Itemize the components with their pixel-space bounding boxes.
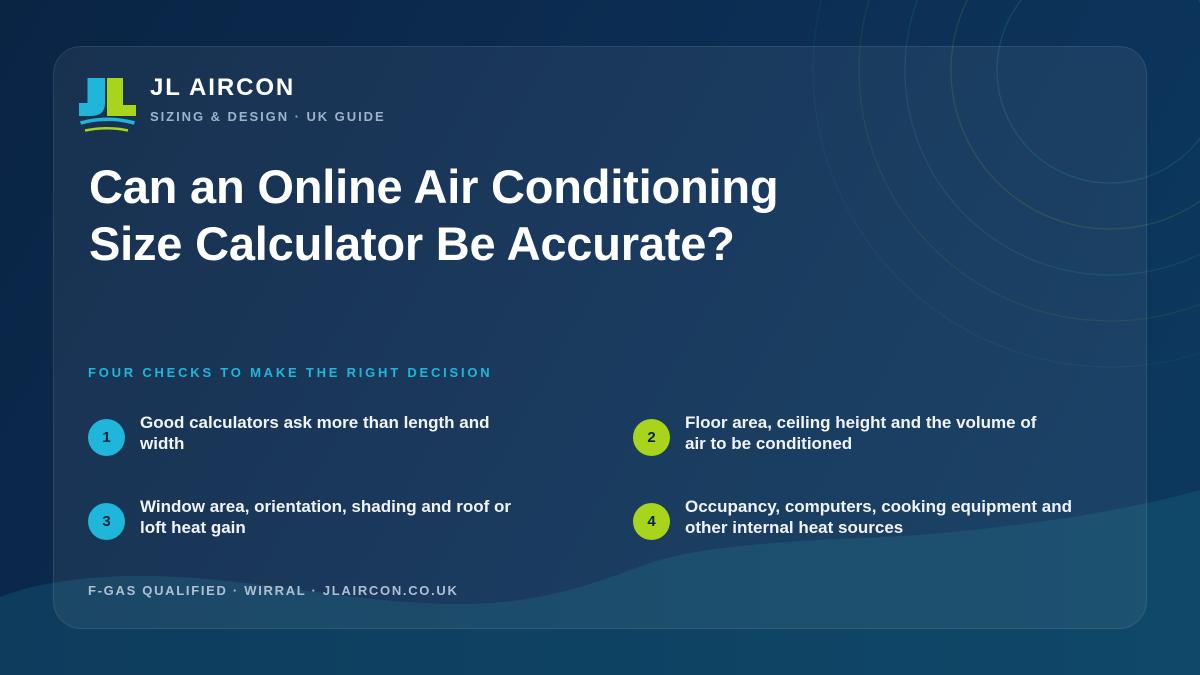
section heading: FOUR CHECKS TO MAKE THE RIGHT DECISION — [88, 365, 492, 380]
text 2: Floor area, ceiling height and the volume of — [685, 413, 1036, 432]
text 3 — [140, 497, 511, 537]
title — [89, 160, 778, 270]
badge 1: 1 — [102, 429, 111, 446]
title: Size Calculator Be Accurate? — [89, 217, 735, 270]
check 1 — [88, 413, 490, 456]
text 4 — [685, 497, 1072, 537]
text 4: other internal heat sources — [685, 518, 903, 537]
badge 2 — [633, 419, 670, 456]
check 3 — [88, 497, 511, 540]
text 3: loft heat gain — [140, 518, 246, 537]
icon: JL Aircon logo — [79, 78, 136, 132]
brand tagline: SIZING & DESIGN · UK GUIDE — [150, 109, 386, 124]
badge 4 — [633, 503, 670, 540]
footer: F-GAS QUALIFIED · WIRRAL · JLAIRCON.CO.UK — [88, 583, 459, 598]
text 1: Good calculators ask more than length and — [140, 413, 490, 432]
brand name: JL AIRCON — [150, 74, 295, 101]
badge 4: 4 — [647, 513, 656, 530]
text 3: Window area, orientation, shading and roof or — [140, 497, 511, 516]
text 4: Occupancy, computers, cooking equipment and — [685, 497, 1072, 516]
check 4 — [633, 497, 1072, 540]
title: Can an Online Air Conditioning — [89, 160, 778, 213]
badge 3 — [88, 503, 125, 540]
check 2 — [633, 413, 1036, 456]
text 1 — [140, 413, 490, 453]
panel: main card — [53, 46, 1147, 629]
text 2: air to be conditioned — [685, 434, 852, 453]
text 2 — [685, 413, 1036, 453]
badge 3: 3 — [102, 513, 111, 530]
text 1: width — [140, 434, 184, 453]
badge 2: 2 — [647, 429, 656, 446]
badge 1 — [88, 419, 125, 456]
